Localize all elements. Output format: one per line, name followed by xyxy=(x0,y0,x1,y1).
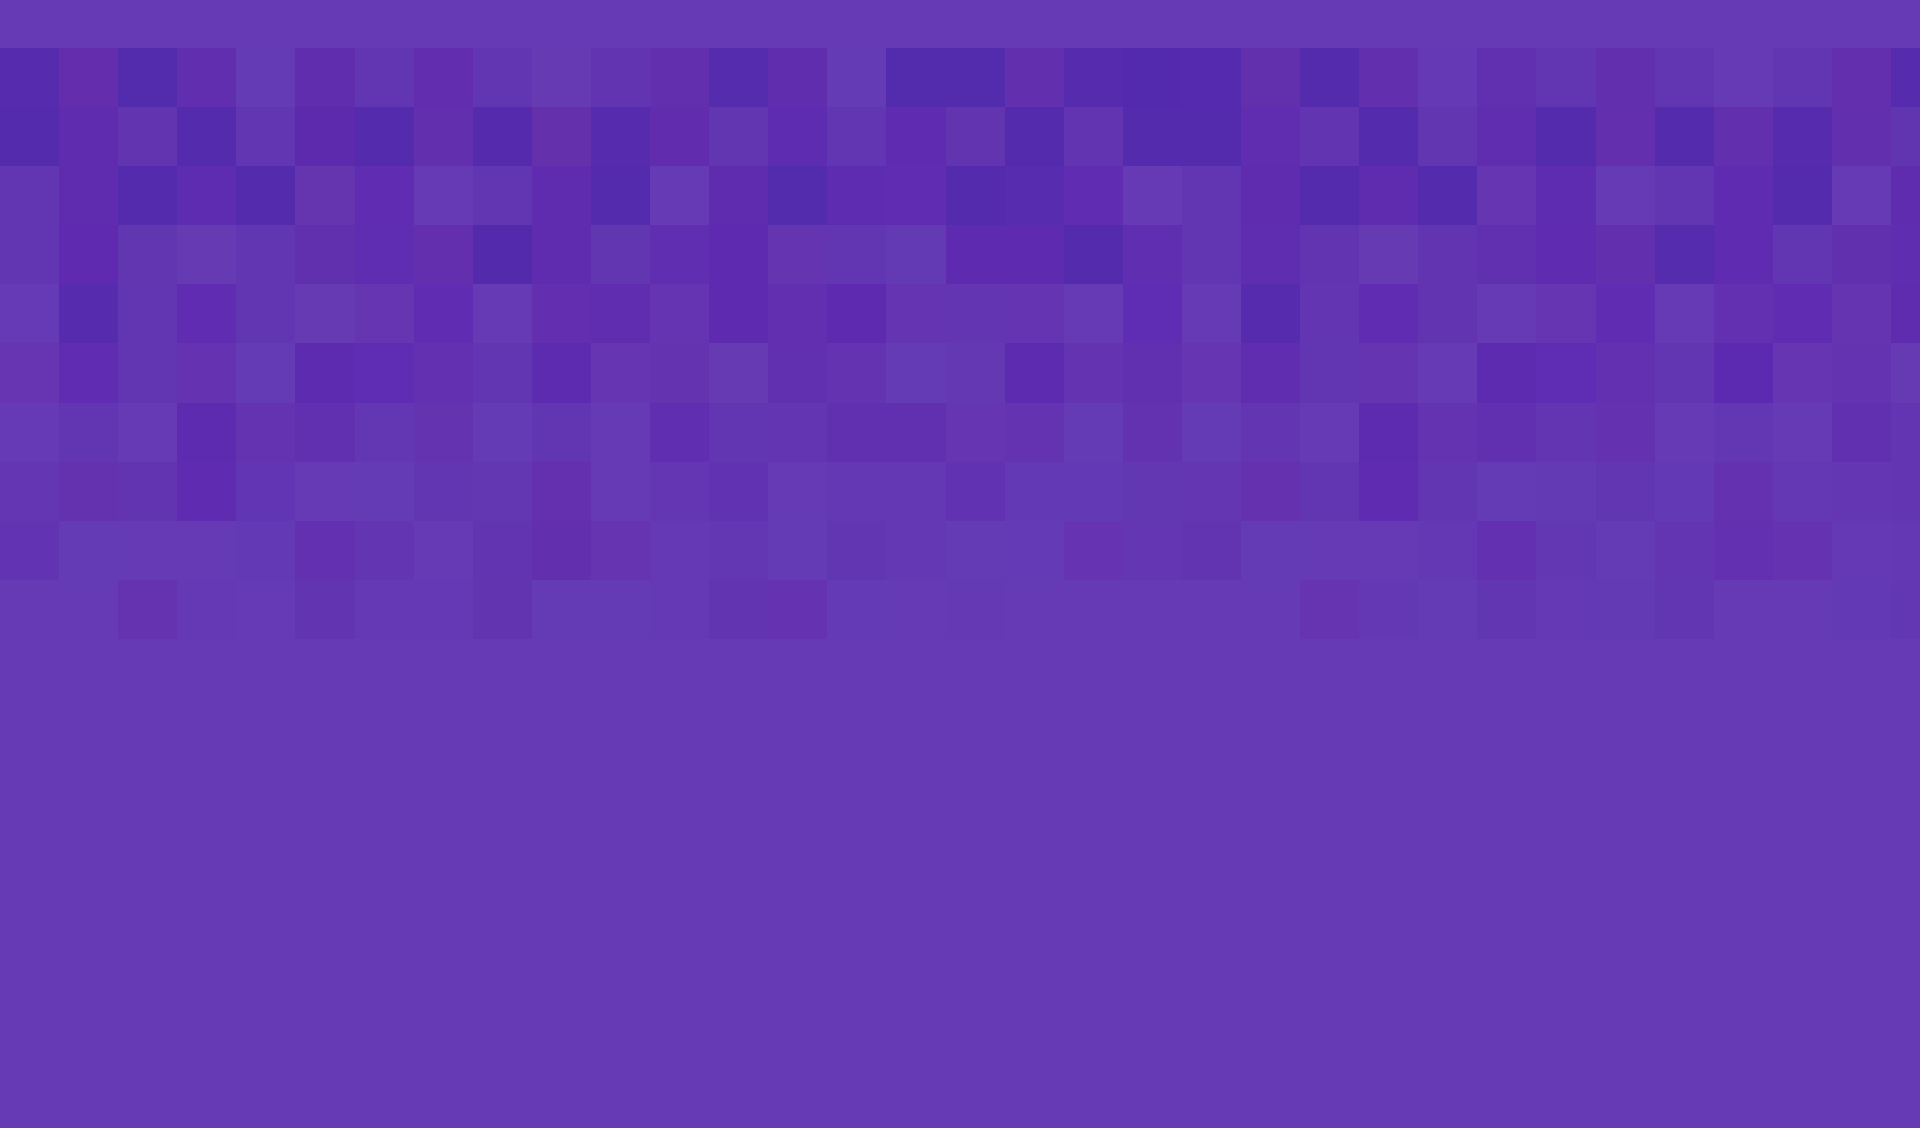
mosaic row 10 xyxy=(0,580,1920,639)
mosaic row 6 xyxy=(59,343,1773,403)
panel: pixel mosaic xyxy=(0,48,1920,580)
mosaic row 3 xyxy=(59,166,1920,225)
mosaic row 2 xyxy=(0,107,1891,166)
mosaic row 8 xyxy=(177,462,1418,521)
mosaic row 1 xyxy=(0,48,1920,107)
mosaic row 7 xyxy=(177,403,1891,462)
mosaic row 9 xyxy=(295,521,1773,580)
mosaic row 5 xyxy=(59,284,1920,343)
mosaic row 4 xyxy=(59,225,1920,284)
